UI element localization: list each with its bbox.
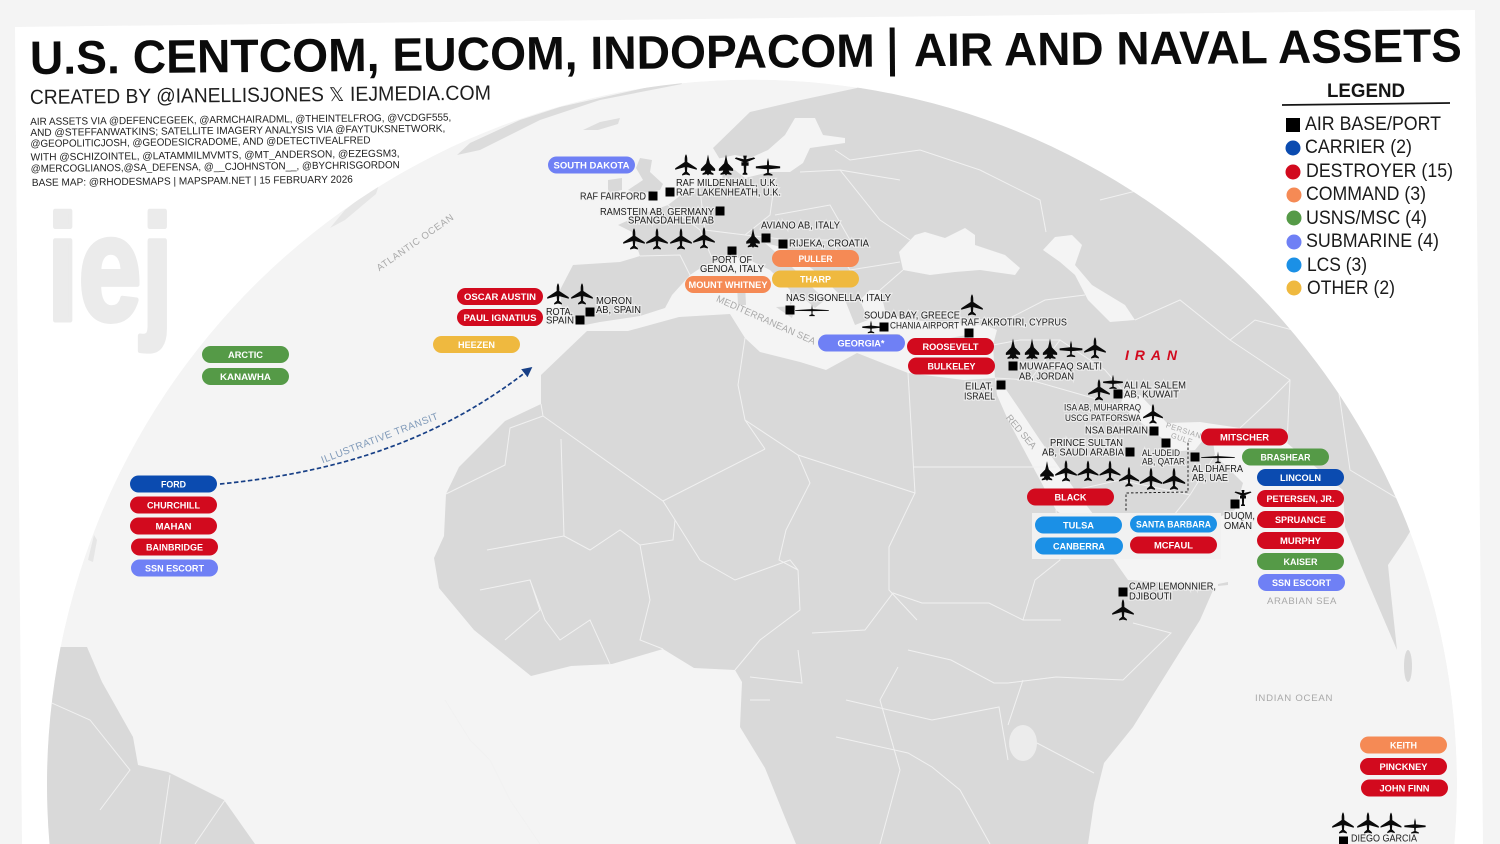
base labels: RAF AKROTIRI, CYPRUS [961, 318, 1067, 328]
base labels: AL DHAFRA [1192, 464, 1243, 475]
land: Eurasia and Arabia [560, 88, 1410, 650]
base labels: CHANIA AIRPORT [890, 320, 959, 330]
legend: CARRIER (2) [1305, 137, 1412, 158]
credits text block: BASE MAP: @RHODESMAPS | MAPSPAM.NET | 15 FEBRUARY 2026 [32, 175, 353, 189]
base labels: ISA AB, MUHARRAQ [1064, 402, 1141, 412]
ship pills: Atlantic and Europe: KANAWHA [220, 372, 271, 383]
geographic water labels: PERSIAN [1165, 421, 1203, 441]
base labels: RAMSTEIN AB, GERMANY [600, 207, 714, 218]
base labels: NSA BAHRAIN [1085, 426, 1148, 436]
light block behind ship pills [1032, 513, 1221, 559]
legend: DESTROYER (15) [1306, 161, 1453, 182]
ship pills: Red Sea, Gulf and Indian Ocean: BRASHEAR [1260, 452, 1311, 464]
transit arrow: ILLUSTRATIVE TRANSIT [320, 411, 440, 466]
base labels: SPANGDAHLEM AB [628, 216, 714, 226]
legend: OTHER (2) [1307, 278, 1395, 299]
ship pills: Atlantic and Europe: SSN ESCORT [145, 564, 204, 574]
byline [30, 82, 491, 109]
ship pills: Atlantic and Europe: MAHAN [156, 522, 192, 532]
base labels: ROTA, [546, 307, 573, 318]
base labels: MORON [596, 296, 632, 307]
land: Africa [434, 314, 1214, 844]
ship pills: Atlantic and Europe [130, 156, 995, 576]
legend: COMMAND (3) [1306, 184, 1426, 205]
ship pills: Atlantic and Europe: MOUNT WHITNEY [688, 280, 768, 291]
base labels: AB, SPAIN [596, 305, 641, 316]
land: islands [608, 158, 1412, 682]
ship pills: Red Sea, Gulf and Indian Ocean: KEITH [1390, 740, 1417, 752]
ship pills: Red Sea, Gulf and Indian Ocean: KAISER [1284, 557, 1318, 568]
ship pills: Red Sea, Gulf and Indian Ocean: TULSA [1063, 520, 1094, 532]
ship pills: Atlantic and Europe: PAUL IGNATIUS [464, 313, 537, 324]
legend [1282, 81, 1453, 299]
base labels: EILAT, [965, 382, 993, 392]
byline: IEJMEDIA.COM [350, 82, 491, 106]
land: South America [47, 647, 255, 844]
geographic water labels: RED SEA [1003, 413, 1039, 452]
credits text block: AND @STEFFANWATKINS; SATELLITE IMAGERY ANALYSIS VIA @FAYTUKSNETWORK, [30, 124, 445, 139]
ship pills: Atlantic and Europe: ARCTIC [228, 350, 263, 361]
ship pills: Atlantic and Europe: FORD [161, 480, 186, 490]
country borders [45, 150, 1400, 844]
base labels: AL-UDEID [1142, 448, 1180, 458]
ship pills: Atlantic and Europe: BAINBRIDGE [146, 542, 204, 554]
aircraft icons [547, 154, 1426, 834]
geographic water labels: INDIAN OCEAN [1255, 693, 1333, 704]
credits text block: @MERCOGLIANOS,@SA_DEFENSA, @__CJOHNSTON__, @BYCHRISGORDON [31, 160, 400, 175]
watermark: iej: iej [47, 184, 173, 352]
legend: LCS (3) [1307, 255, 1367, 276]
geographic water labels [375, 212, 1337, 704]
geographic water labels: ARABIAN SEA [1267, 596, 1337, 607]
base labels: DUQM, [1224, 511, 1255, 522]
base labels: PORT OF [712, 255, 752, 266]
base labels: MUWAFFAQ SALTI [1019, 362, 1102, 372]
base labels: CAMP LEMONNIER, [1129, 582, 1216, 592]
base labels: OMAN [1224, 521, 1252, 532]
title: AIR AND NAVAL ASSETS [914, 19, 1462, 76]
title [30, 19, 1462, 84]
geographic water labels: ATLANTIC OCEAN [375, 212, 456, 274]
base labels: AVIANO AB, ITALY [761, 220, 840, 232]
ship pills: Atlantic and Europe: BULKELEY [928, 362, 976, 372]
credits text block: AIR ASSETS VIA @DEFENCEGEEK, @ARMCHAIRADML, @THEINTELFROG, @VCDGF555, [30, 113, 451, 128]
ship pills: Atlantic and Europe: GEORGIA* [838, 338, 885, 350]
base labels: GENOA, ITALY [700, 264, 764, 275]
base labels: AB, SAUDI ARABIA [1042, 448, 1124, 458]
land: Greenland and Iceland [330, 80, 682, 228]
base labels: AB, KUWAIT [1124, 390, 1180, 400]
base labels: RIJEKA, CROATIA [789, 238, 869, 250]
ship pills: Red Sea, Gulf and Indian Ocean: SSN ESCORT [1272, 578, 1331, 589]
ship pills: Atlantic and Europe: THARP [800, 274, 832, 286]
title: U.S. CENTCOM, EUCOM, INDOPACOM [30, 24, 875, 84]
land: Central America sliver [88, 535, 97, 562]
ship pills: Red Sea, Gulf and Indian Ocean [1027, 428, 1448, 796]
credits text block: WITH @SCHIZOINTEL, @LATAMMILMVMTS, @MT_ANDERSON, @EZEGSM3, [31, 149, 400, 163]
legend: AIR BASE/PORT [1305, 114, 1441, 135]
byline: CREATED BY @IANELLISJONES [30, 83, 324, 109]
base labels: NAS SIGONELLA, ITALY [786, 293, 891, 304]
ship pills: Red Sea, Gulf and Indian Ocean: PINCKNEY [1380, 762, 1428, 773]
ship pills: Atlantic and Europe: ROOSEVELT [922, 342, 979, 353]
ship pills: Red Sea, Gulf and Indian Ocean: MITSCHER [1220, 432, 1269, 444]
geographic water labels: MEDITERRANEAN SEA [714, 294, 818, 348]
base labels: RAF MILDENHALL, U.K. [676, 178, 778, 189]
base labels: AB, QATAR [1142, 456, 1185, 466]
ship pills: Red Sea, Gulf and Indian Ocean: MURPHY [1280, 536, 1322, 547]
ship pills: Red Sea, Gulf and Indian Ocean: SPRUANCE [1275, 515, 1327, 526]
credits text block [30, 113, 452, 189]
ship pills: Red Sea, Gulf and Indian Ocean: SANTA BARBARA [1136, 520, 1211, 530]
base labels: AB, JORDAN [1019, 372, 1074, 382]
country label: Iran: IRAN [1125, 347, 1178, 363]
base labels: ISRAEL [964, 392, 995, 402]
base labels: PRINCE SULTAN [1050, 438, 1123, 449]
base labels: ALI AL SALEM [1124, 380, 1186, 392]
ship pills: Red Sea, Gulf and Indian Ocean: MCFAUL [1154, 540, 1193, 552]
ship pills: Red Sea, Gulf and Indian Ocean: JOHN FINN [1380, 784, 1430, 794]
air base and port markers [576, 188, 1348, 844]
base labels: SPAIN [546, 316, 574, 326]
base labels: USCG PATFORSWA [1065, 413, 1141, 423]
ship pills: Red Sea, Gulf and Indian Ocean: CANBERRA [1053, 542, 1105, 552]
ship pills: Atlantic and Europe: HEEZEN [458, 340, 495, 351]
base labels: RAF LAKENHEATH, U.K. [676, 188, 781, 198]
ship pills: Red Sea, Gulf and Indian Ocean: LINCOLN [1280, 473, 1321, 484]
ship pills: Atlantic and Europe: PULLER [798, 254, 833, 265]
lake Victoria [1009, 725, 1037, 761]
ship pills: Atlantic and Europe: OSCAR AUSTIN [464, 292, 536, 303]
legend: SUBMARINE (4) [1306, 231, 1439, 252]
geographic water labels: GULF [1170, 431, 1194, 446]
ship pills: Atlantic and Europe: SOUTH DAKOTA [554, 160, 630, 172]
ship pills: Atlantic and Europe: CHURCHILL [147, 500, 200, 512]
seas: Black Sea, Caspian, Baltic [712, 118, 1135, 322]
base labels [546, 178, 1417, 844]
byline: 𝕏 [329, 84, 344, 106]
legend: LEGEND [1327, 81, 1405, 102]
base labels: SOUDA BAY, GREECE [864, 310, 960, 322]
ship pills: Red Sea, Gulf and Indian Ocean: PETERSEN, JR. [1266, 494, 1334, 505]
base labels: DJIBOUTI [1129, 592, 1172, 602]
legend: USNS/MSC (4) [1306, 208, 1427, 229]
credits text block: @GEOPOLITICJOSH, @GEODESICRADOME, AND @DETECTIVEALFRED [30, 135, 371, 150]
base labels: RAF FAIRFORD [580, 192, 646, 202]
base labels: AB, UAE [1192, 473, 1228, 484]
dotted zone line [1126, 443, 1188, 512]
transit arrow [220, 368, 531, 484]
ship pills: Red Sea, Gulf and Indian Ocean: BLACK [1054, 492, 1087, 504]
